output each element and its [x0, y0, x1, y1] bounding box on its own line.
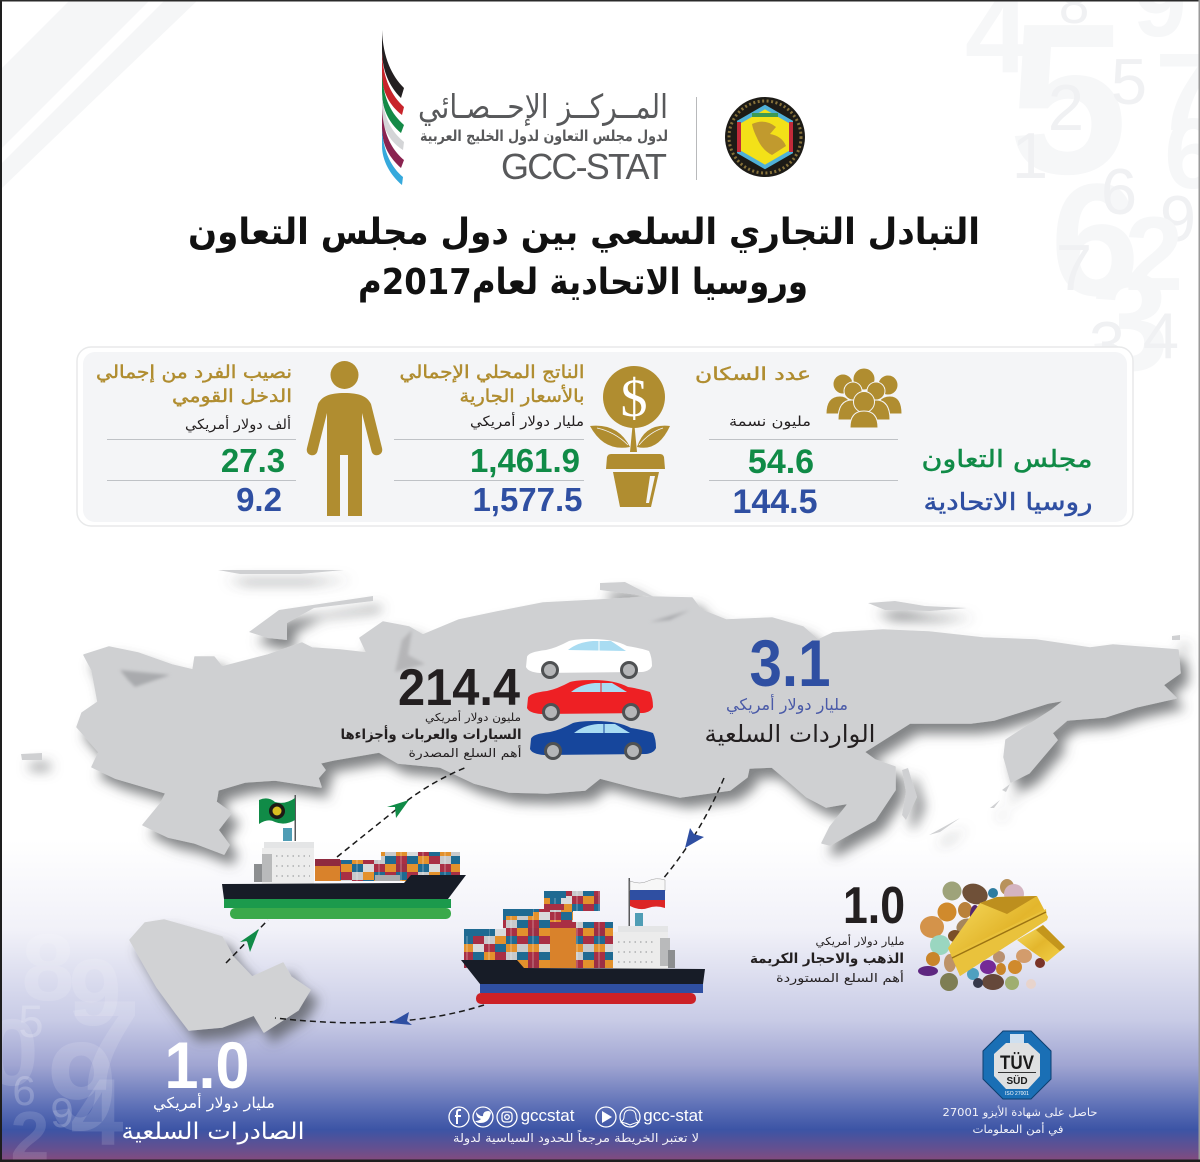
GDP heading: بالأسعار الجارية — [460, 385, 584, 407]
social media — [449, 1106, 703, 1127]
income unit: ألف دولار أمريكي — [185, 415, 291, 433]
export callout: السيارات والعربات وأجزاءها — [340, 725, 522, 743]
icon: TÜV SÜD badge: TÜV — [1000, 1053, 1034, 1074]
population GCC value: 54.6 — [748, 443, 814, 481]
icon: red car — [527, 680, 653, 721]
icon: gold bars and gems — [918, 879, 1065, 991]
background digits top-right: 2 — [1048, 71, 1084, 144]
decorative diagonal stripes top-left — [0, 0, 198, 190]
ISO certificate note: حاصل على شهادة الأيزو 27001 — [942, 1105, 1098, 1119]
imported goods callout: مليار دولار أمريكي — [816, 934, 905, 948]
icon: TÜV SÜD badge: SÜD — [1006, 1074, 1028, 1087]
ship: GCC green — [222, 795, 466, 919]
map: Saudi Arabia and GCC — [130, 920, 310, 1032]
imports callout: مليار دولار أمريكي — [726, 694, 848, 715]
export callout — [340, 659, 522, 761]
logo GCC-STAT wordmark: GCC-STAT — [501, 146, 667, 187]
imported goods callout: الذهب والاحجار الكريمة — [750, 951, 904, 967]
panel: key indicators — [77, 347, 1133, 526]
background digits top-right: 6 — [1051, 150, 1139, 329]
title: وروسيا الاتحادية لعام2017م — [358, 262, 808, 303]
title — [188, 212, 980, 303]
icon: GCC emblem — [725, 97, 805, 177]
arrow: Saudi Arabia to GCC ship — [226, 920, 268, 963]
background digits top-right: 6 — [1101, 155, 1137, 228]
GDP unit: مليار دولار أمريكي — [470, 412, 584, 430]
row labels — [922, 445, 1092, 516]
map: Russia and neighbours — [21, 570, 1180, 854]
imported goods callout — [750, 877, 905, 986]
background digits bottom-left: 9 — [47, 1018, 117, 1157]
population Russia value: 144.5 — [732, 483, 818, 521]
icon: blue car — [530, 721, 656, 760]
background digits top-right: 4 — [1143, 299, 1179, 372]
income GCC value: 27.3 — [221, 442, 285, 479]
background digits top-right: 3 — [1089, 308, 1125, 381]
icon: GCC flag — [259, 795, 296, 841]
income heading — [96, 362, 292, 407]
background digits bottom-left: 9 — [50, 1089, 74, 1136]
background digits top-right: 1 — [1012, 119, 1048, 192]
background digits top-right: 9 — [1160, 182, 1196, 255]
icon: population group — [826, 368, 902, 428]
imported goods callout: 1.0 — [843, 877, 905, 935]
arrow: Russian ship to Saudi Arabia — [275, 1005, 484, 1025]
ISO certificate note — [942, 1105, 1098, 1136]
icon: Russian flag — [628, 878, 665, 928]
export callout: أهم السلع المصدرة — [408, 745, 522, 761]
GDP heading — [400, 362, 584, 407]
ISO certificate note: في أمن المعلومات — [972, 1122, 1064, 1136]
background digits bottom-left: 7 — [69, 975, 141, 1118]
icon: person — [307, 361, 382, 516]
export callout: 214.4 — [398, 659, 520, 717]
logo Arabic name: المــركــز الإحــصـائي — [418, 87, 668, 126]
row labels: روسيا الاتحادية — [924, 488, 1092, 516]
background digits bottom-left: 8 — [22, 915, 74, 1021]
map disclaimer: لا تعتبر الخريطة مرجعاً للحدود السياسية لدولة — [453, 1129, 699, 1146]
icon: TÜV SÜD badge — [983, 1031, 1051, 1099]
background digits top-right: 5 — [1111, 45, 1147, 118]
exports callout: مليار دولار أمريكي — [153, 1093, 275, 1113]
icon: logo swoosh — [382, 30, 404, 185]
income Russia value: 9.2 — [236, 481, 282, 518]
background digits bottom-left: 6 — [12, 1067, 36, 1114]
icon: TÜV SÜD badge: ISO 27001 — [1005, 1091, 1029, 1097]
icon: white car — [526, 639, 652, 679]
GDP heading: الناتج المحلي الإجمالي — [400, 362, 584, 383]
imported goods callout: أهم السلع المستوردة — [776, 970, 904, 986]
background digits top-right: 2 — [1125, 196, 1183, 313]
income heading: الدخل القومي — [172, 386, 292, 407]
GDP Russia value: 1,577.5 — [472, 481, 583, 518]
income heading: نصيب الفرد من إجمالي — [96, 362, 292, 383]
background digits bottom-left — [0, 915, 141, 1162]
background digits bottom-left: 5 — [18, 996, 44, 1047]
imports callout — [704, 626, 876, 748]
title: التبادل التجاري السلعي بين دول مجلس التعاون — [188, 212, 980, 253]
social media: gccstat — [521, 1106, 575, 1125]
population unit: مليون نسمة — [729, 414, 811, 430]
arrow: Russia to Russian ship — [662, 778, 724, 880]
logo subtitle: لدول مجلس التعاون لدول الخليج العربية — [420, 127, 668, 145]
row labels: مجلس التعاون — [922, 445, 1092, 473]
GDP GCC value: 1,461.9 — [470, 442, 580, 479]
background digits bottom-left: 9 — [69, 940, 121, 1046]
icon: money plant — [590, 366, 670, 507]
icon: social circles — [449, 1107, 640, 1127]
exports callout — [122, 1028, 304, 1145]
background digits top-right: 3 — [1091, 243, 1169, 400]
exports callout: 1.0 — [164, 1028, 250, 1102]
logo: GCC-STAT — [382, 30, 697, 187]
map: inner gulf shading — [120, 610, 690, 687]
export callout: مليون دولار أمريكي — [425, 710, 521, 724]
social media: gcc-stat — [643, 1106, 703, 1125]
imports callout: 3.1 — [750, 626, 830, 700]
arrow: GCC to Russia — [337, 767, 467, 857]
cars stack — [526, 639, 656, 760]
background digits top-right — [965, 0, 1200, 400]
population heading: عدد السكان — [695, 364, 811, 385]
icon: money plant: $ — [620, 368, 648, 428]
imports callout: الواردات السلعية — [704, 720, 876, 748]
background digits top-right: 7 — [1056, 231, 1092, 304]
ship: Russia blue and red — [461, 878, 705, 1004]
exports callout: الصادرات السلعية — [122, 1119, 304, 1145]
